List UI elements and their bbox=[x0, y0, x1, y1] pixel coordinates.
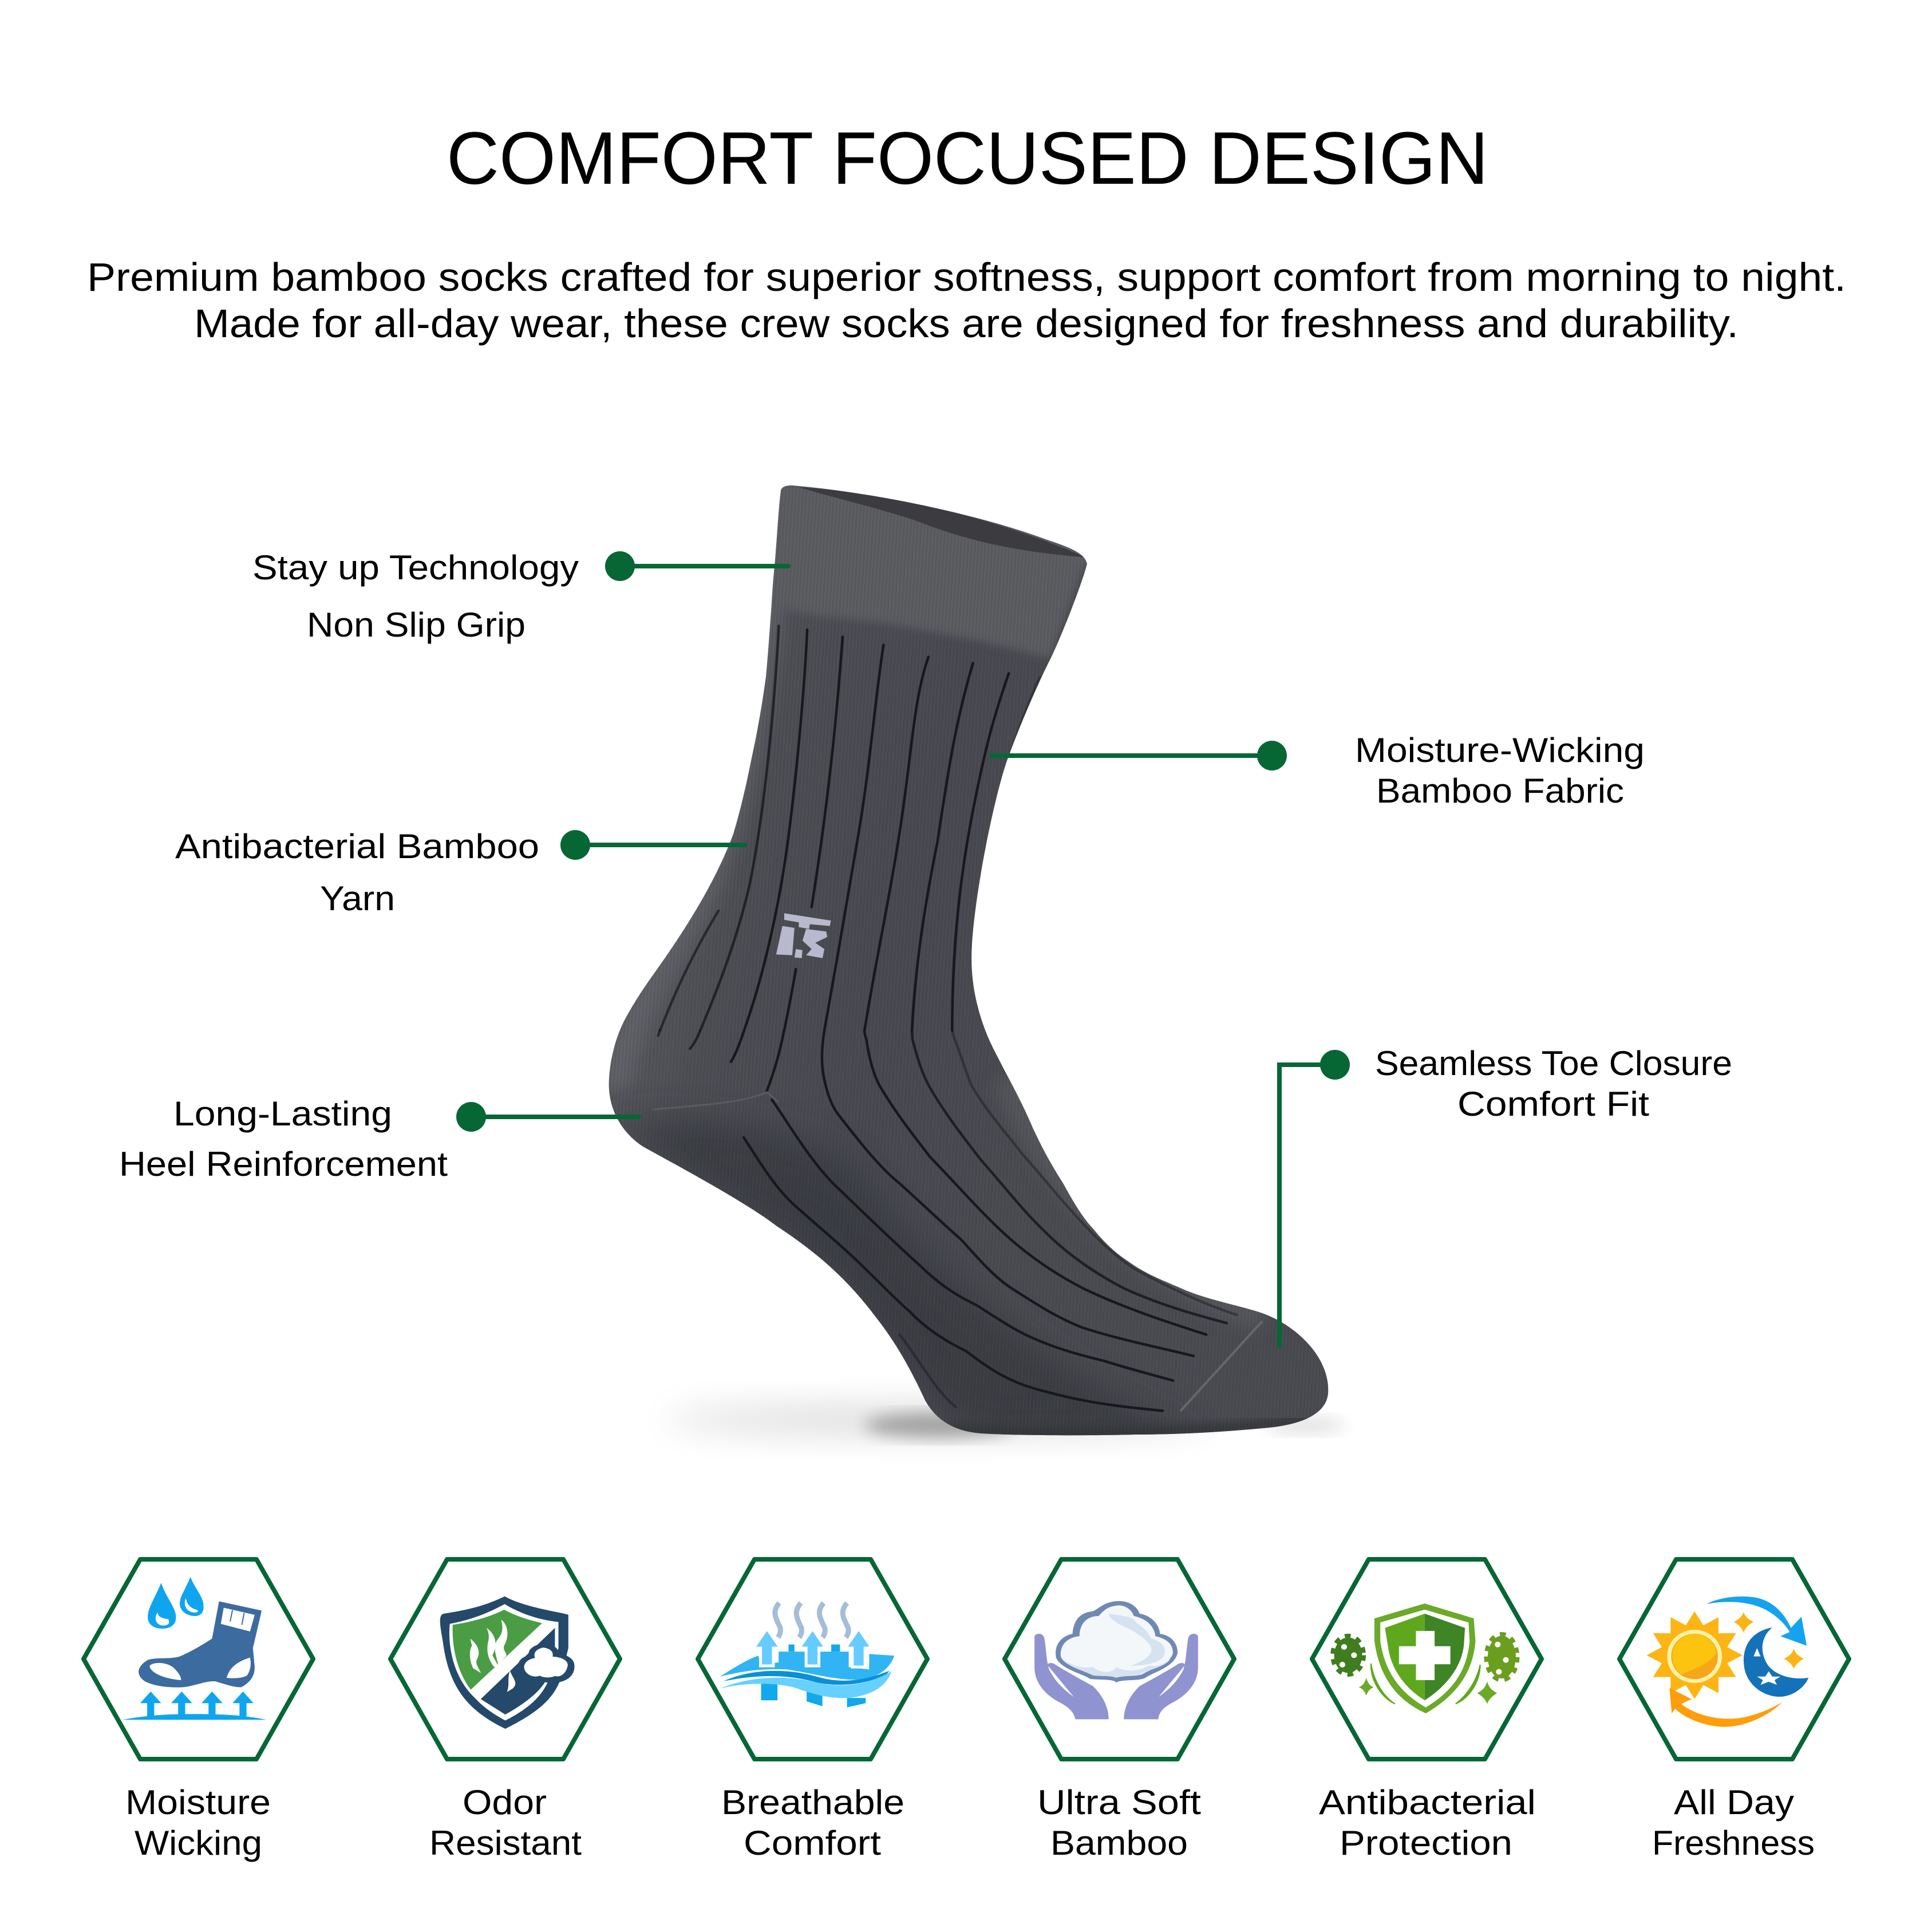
intro paragraph: Premium bamboo socks crafted for superior softness, support comfort from morning to night. bbox=[87, 255, 1846, 299]
leader line bbox=[560, 830, 747, 860]
icon: cloud held by hands bbox=[1034, 1601, 1198, 1719]
inside of the opening bbox=[799, 487, 1085, 557]
label: Comfort bbox=[744, 1824, 881, 1862]
intro paragraph bbox=[87, 255, 1846, 346]
callout: seamless toe bbox=[1279, 1044, 1732, 1346]
toe seam bbox=[1180, 1321, 1262, 1411]
icon: split shield with cloud bbox=[440, 1597, 574, 1729]
heel seam bbox=[653, 1092, 779, 1109]
hexagon bbox=[698, 1559, 927, 1759]
badge: antibacterial protection bbox=[1312, 1559, 1542, 1862]
badge: ultra soft bamboo bbox=[1005, 1559, 1234, 1862]
callout text: Comfort Fit bbox=[1457, 1085, 1649, 1123]
hexagon bbox=[1312, 1559, 1542, 1759]
callout text bbox=[1355, 731, 1645, 810]
callout text: Moisture-Wicking bbox=[1355, 731, 1645, 769]
label: Freshness bbox=[1652, 1824, 1815, 1862]
hexagon bbox=[390, 1559, 620, 1759]
callout: stay up technology bbox=[252, 548, 791, 644]
label: All Day bbox=[1674, 1783, 1794, 1822]
label: Moisture bbox=[125, 1783, 271, 1822]
intro paragraph: Made for all-day wear, these crew socks are designed for freshness and durability. bbox=[194, 301, 1739, 346]
label bbox=[1037, 1783, 1201, 1862]
hexagon bbox=[84, 1559, 313, 1759]
label: Wicking bbox=[135, 1824, 262, 1862]
callout text bbox=[252, 548, 579, 644]
sock logo mark bbox=[776, 913, 831, 958]
label bbox=[1319, 1783, 1536, 1862]
callout text: Yarn bbox=[320, 879, 395, 918]
label: Protection bbox=[1340, 1824, 1512, 1862]
foot ribs bbox=[658, 1030, 1237, 1411]
badge: all day freshness bbox=[1619, 1559, 1849, 1862]
title: COMFORT FOCUSED DESIGN bbox=[447, 116, 1488, 200]
callout: moisture wicking fabric bbox=[989, 731, 1645, 810]
badge: odor resistant bbox=[390, 1559, 620, 1862]
cuff band bbox=[761, 475, 1099, 658]
left edge highlight bbox=[615, 498, 776, 1088]
callout text: Seamless Toe Closure bbox=[1375, 1044, 1732, 1082]
label: Bamboo bbox=[1050, 1824, 1188, 1862]
callout: heel reinforcement bbox=[119, 1095, 641, 1183]
label: Breathable bbox=[721, 1783, 904, 1822]
elbow leader line bbox=[1279, 1050, 1350, 1346]
badge: breathable comfort bbox=[698, 1559, 927, 1862]
callout: antibacterial yarn bbox=[175, 827, 747, 918]
label: Ultra Soft bbox=[1037, 1783, 1201, 1822]
badge: moisture wicking bbox=[84, 1559, 313, 1862]
icon: sun and moon cycle bbox=[1647, 1597, 1808, 1727]
leader line bbox=[989, 741, 1287, 771]
icon: shield with cross and germs bbox=[1334, 1603, 1516, 1713]
leg ribs bbox=[660, 626, 1040, 1030]
foot shading bbox=[607, 1120, 1202, 1443]
label bbox=[429, 1783, 582, 1862]
leader line bbox=[456, 1102, 641, 1132]
label bbox=[721, 1783, 904, 1862]
bottom edge shade bbox=[950, 1420, 1317, 1435]
sock photo illustration bbox=[609, 485, 1342, 1446]
leader line bbox=[605, 551, 791, 581]
icon: breathable layers with rising air bbox=[720, 1603, 894, 1708]
callout text: Long-Lasting bbox=[173, 1095, 392, 1133]
callout text bbox=[175, 827, 539, 918]
callout text: Bamboo Fabric bbox=[1376, 772, 1624, 810]
label: Odor bbox=[463, 1783, 547, 1822]
upper foot highlight bbox=[1008, 1076, 1265, 1317]
label bbox=[1652, 1783, 1815, 1862]
label: Antibacterial bbox=[1319, 1783, 1536, 1822]
knit texture bbox=[572, 458, 1374, 1488]
ground shadow bbox=[664, 1407, 1345, 1438]
callout text: Antibacterial Bamboo bbox=[175, 827, 539, 866]
callout text bbox=[1375, 1044, 1732, 1123]
label bbox=[125, 1783, 271, 1862]
callout text: Stay up Technology bbox=[252, 548, 579, 587]
callout text: Heel Reinforcement bbox=[119, 1145, 448, 1183]
hexagon bbox=[1619, 1559, 1849, 1759]
label: Resistant bbox=[429, 1824, 582, 1862]
callout text: Non Slip Grip bbox=[307, 606, 526, 644]
callout text bbox=[119, 1095, 448, 1183]
icon: sock with water drops bbox=[123, 1577, 266, 1720]
sock body bbox=[609, 485, 1328, 1436]
hexagon bbox=[1005, 1559, 1234, 1759]
